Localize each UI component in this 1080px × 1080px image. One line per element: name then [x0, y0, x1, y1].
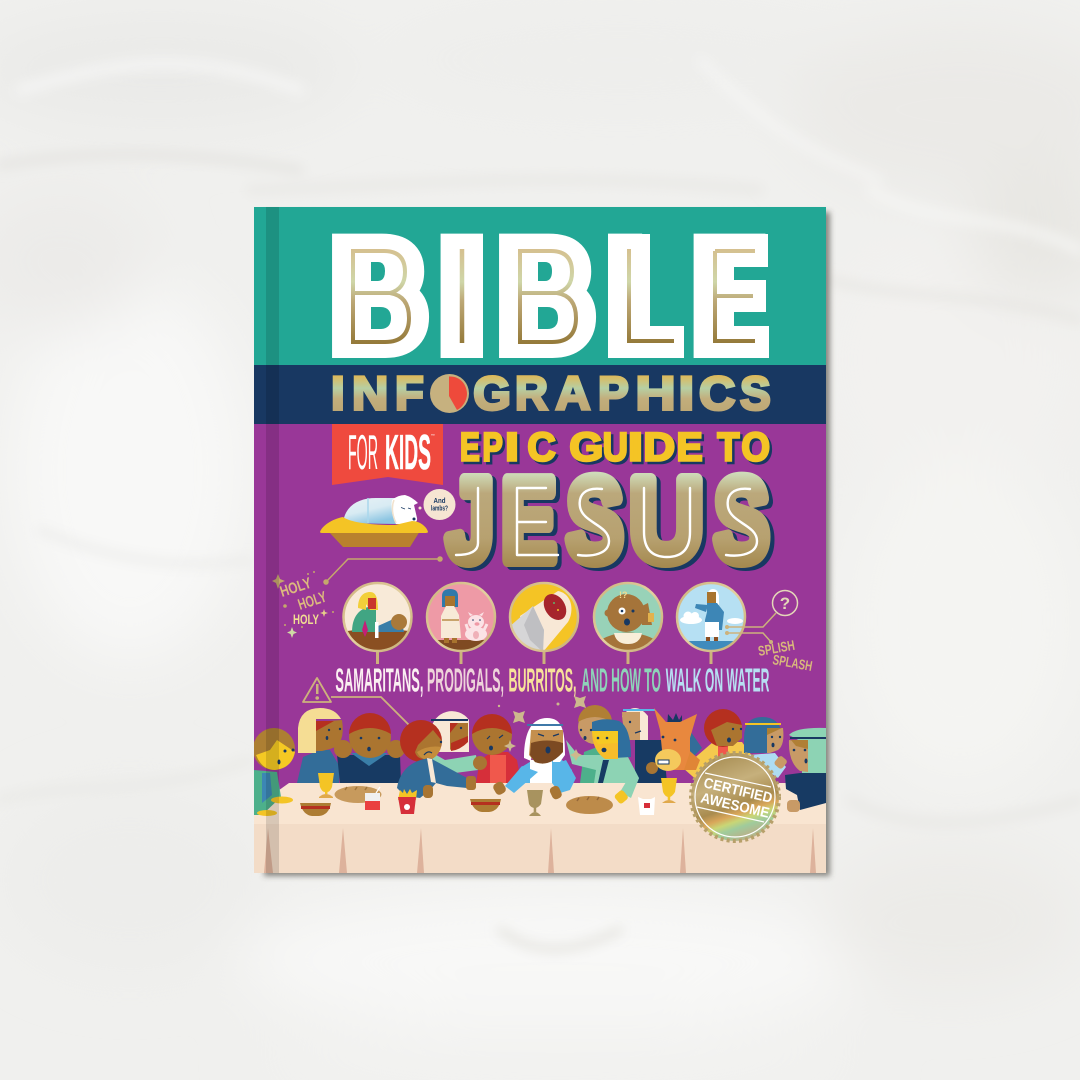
figure: donkey	[654, 708, 702, 771]
figure: woman with red hair	[683, 709, 752, 783]
figure: disciple with yellow face	[566, 719, 639, 783]
letter counters	[371, 262, 558, 329]
callout: question and splish splash: SPLISH	[757, 637, 796, 659]
medallion: Prodigal son	[425, 583, 501, 664]
medallion: burrito	[508, 583, 578, 664]
figure: blonde disciple	[297, 708, 343, 783]
figure: disciple behind, brown hair	[578, 705, 612, 783]
title: BIBLE: L	[610, 216, 675, 376]
subtitle: EPIC GUIDE TO: G	[572, 427, 606, 472]
manger	[330, 533, 419, 547]
figure: disciple in red	[472, 714, 521, 783]
title: INFOGRAPHICS: I	[331, 368, 345, 420]
title: INFOGRAPHICS: S	[740, 367, 771, 420]
HOLY HOLY HOLY: HOLY	[293, 611, 319, 627]
title: JESUS: S	[715, 456, 769, 585]
subtitle: EPIC GUIDE TO: D	[646, 427, 678, 472]
subtitle: EPIC GUIDE TO	[461, 431, 772, 465]
book cover: WALK ON WATER	[666, 662, 769, 698]
book spine crease	[266, 207, 279, 873]
title: INFOGRAPHICS: I	[678, 368, 694, 420]
tagline	[336, 668, 770, 697]
takeout box	[638, 797, 655, 815]
subtitle: EPIC GUIDE TO: P	[485, 427, 505, 472]
seal: Certified Awesome: AWESOME	[699, 790, 771, 822]
HOLY HOLY HOLY	[272, 571, 334, 638]
bread 2	[566, 796, 613, 814]
navy band	[254, 365, 826, 424]
title: BIBLE	[332, 234, 769, 358]
seal: Certified Awesome	[691, 753, 779, 841]
title: BIBLE: B	[335, 216, 424, 376]
lamb body	[343, 498, 397, 524]
tablecloth	[254, 824, 826, 873]
banner: FOR KIDS: FOR	[348, 426, 378, 480]
title: INFOGRAPHICS: R	[515, 367, 548, 420]
goblet gold right	[661, 778, 677, 803]
blue jacket and fists	[397, 758, 476, 798]
table scene: Last Supper	[253, 696, 826, 873]
purple panel	[254, 424, 826, 804]
medallion: baby: !?	[619, 590, 628, 600]
subtitle: EPIC GUIDE TO: E	[462, 428, 482, 472]
HOLY HOLY HOLY: HOLY	[296, 589, 329, 614]
subtitle: EPIC GUIDE TO: U	[605, 427, 630, 472]
title: JESUS: S	[567, 457, 623, 585]
medallion: Good Samaritan	[340, 583, 416, 664]
gold inline	[353, 249, 755, 343]
subtitle: EPIC GUIDE TO: C	[527, 425, 556, 470]
tagline: SAMARITANS,	[335, 662, 423, 698]
title: INFOGRAPHICS: N	[352, 368, 388, 420]
title: JESUS: J	[447, 457, 493, 585]
lamb head	[392, 495, 418, 524]
figure: blue-haired disciple	[744, 717, 788, 778]
book cover: KIDS	[385, 426, 431, 480]
sparkles	[272, 571, 334, 638]
fries	[398, 789, 417, 814]
red drink	[365, 787, 380, 810]
pie chart letter O	[430, 374, 469, 413]
goblet tan	[527, 790, 543, 816]
subtitle: EPIC GUIDE TO: I	[505, 424, 519, 469]
subtitle: EPIC GUIDE TO: I	[630, 428, 646, 472]
figure: disciple in dark robe	[622, 708, 667, 783]
thought bubble	[424, 489, 456, 520]
title: BIBLE: E	[696, 217, 762, 376]
JESUS shadow: U	[634, 460, 707, 589]
letter trims	[607, 234, 768, 358]
lamb in a manger: lambs?	[431, 504, 448, 512]
warning sign callout	[302, 677, 409, 725]
JESUS white inline	[456, 488, 757, 557]
HOLY HOLY HOLY: HOLY	[278, 575, 314, 601]
subtitle: EPIC GUIDE TO: O	[741, 425, 770, 470]
subtitle: EPIC GUIDE TO: T	[717, 426, 739, 470]
bowl 1	[300, 803, 331, 816]
JESUS shadow	[456, 476, 774, 571]
title: BIBLE: I	[444, 215, 480, 375]
subtitle: EPIC GUIDE TO: E	[676, 425, 703, 470]
figure: disciple in white headdress	[431, 711, 469, 752]
pie chart letter O: O	[436, 380, 450, 412]
subtitle: EPIC GUIDE TO: E	[679, 428, 705, 472]
banner: FOR KIDS: ™	[431, 433, 435, 438]
figure: right disciple in mint headdress	[785, 728, 826, 812]
book shadow	[264, 212, 830, 876]
sleeve with yellow hand	[614, 770, 639, 805]
medallion: baby	[594, 583, 662, 664]
subtitle: EPIC GUIDE TO: O	[744, 428, 773, 472]
JESUS shadow: S	[571, 460, 627, 588]
subtitle: EPIC GUIDE TO: I	[508, 427, 521, 472]
table top	[254, 783, 826, 825]
decorative stars	[498, 696, 586, 761]
letter stems	[482, 234, 769, 358]
title: INFOGRAPHICS: A	[556, 368, 590, 420]
subtitle: EPIC GUIDE TO: C	[530, 428, 558, 472]
bread 1	[334, 786, 382, 803]
lamb in a manger	[320, 489, 456, 547]
subtitle: EPIC GUIDE TO: D	[643, 424, 675, 469]
title: INFOGRAPHICS: C	[699, 368, 735, 420]
callout: question and splish splash	[725, 590, 814, 674]
subtitle: EPIC GUIDE TO: T	[720, 428, 742, 472]
sleeves of Jesus	[492, 760, 576, 801]
cloth pleats	[264, 828, 816, 873]
title: INFOGRAPHICS: H	[636, 367, 676, 420]
teal title band	[254, 207, 826, 365]
figure: surprised disciple	[334, 713, 405, 783]
seal: Certified Awesome: CERTIFIED	[702, 775, 774, 807]
JESUS shadow: J	[451, 460, 497, 588]
subtitle: EPIC GUIDE TO: I	[628, 425, 643, 470]
subtitle: EPIC GUIDE TO: E	[460, 425, 480, 470]
figure: disciple with red hair, teal arm	[400, 720, 487, 773]
title: JESUS: U	[630, 457, 703, 586]
bowl 2	[470, 799, 501, 812]
callout: question and splish splash: ?	[780, 594, 790, 613]
book cover	[253, 207, 826, 873]
hay	[320, 517, 428, 533]
goblet left	[318, 773, 334, 798]
title: JESUS	[443, 472, 774, 571]
title: BIBLE: B	[502, 216, 591, 376]
title: INFOGRAPHICS: G	[473, 368, 511, 420]
subtitle: EPIC GUIDE TO: U	[603, 424, 628, 469]
title: JESUS: E	[502, 456, 556, 585]
tagline: AND HOW TO	[581, 662, 661, 698]
title: INFOGRAPHICS: F	[395, 366, 424, 420]
connector to HOLY	[324, 557, 442, 584]
subtitle: EPIC GUIDE TO: G	[569, 424, 603, 469]
lamb in a manger: And	[434, 496, 446, 505]
subtitle: EPIC GUIDE TO: P	[482, 424, 503, 470]
title: INFOGRAPHICS: P	[598, 367, 629, 420]
figure: Jesus	[515, 718, 572, 785]
callout: question and splish splash: SPLASH	[771, 651, 814, 674]
tagline: BURRITOS,	[508, 662, 576, 698]
JESUS shadow: E	[506, 459, 560, 588]
JESUS shadow: S	[719, 459, 773, 588]
medallion: walking on water	[675, 583, 747, 664]
title: INFOGRAPHICS	[332, 374, 770, 413]
figure: child left	[253, 728, 295, 816]
tagline: PRODIGALS,	[427, 662, 504, 698]
